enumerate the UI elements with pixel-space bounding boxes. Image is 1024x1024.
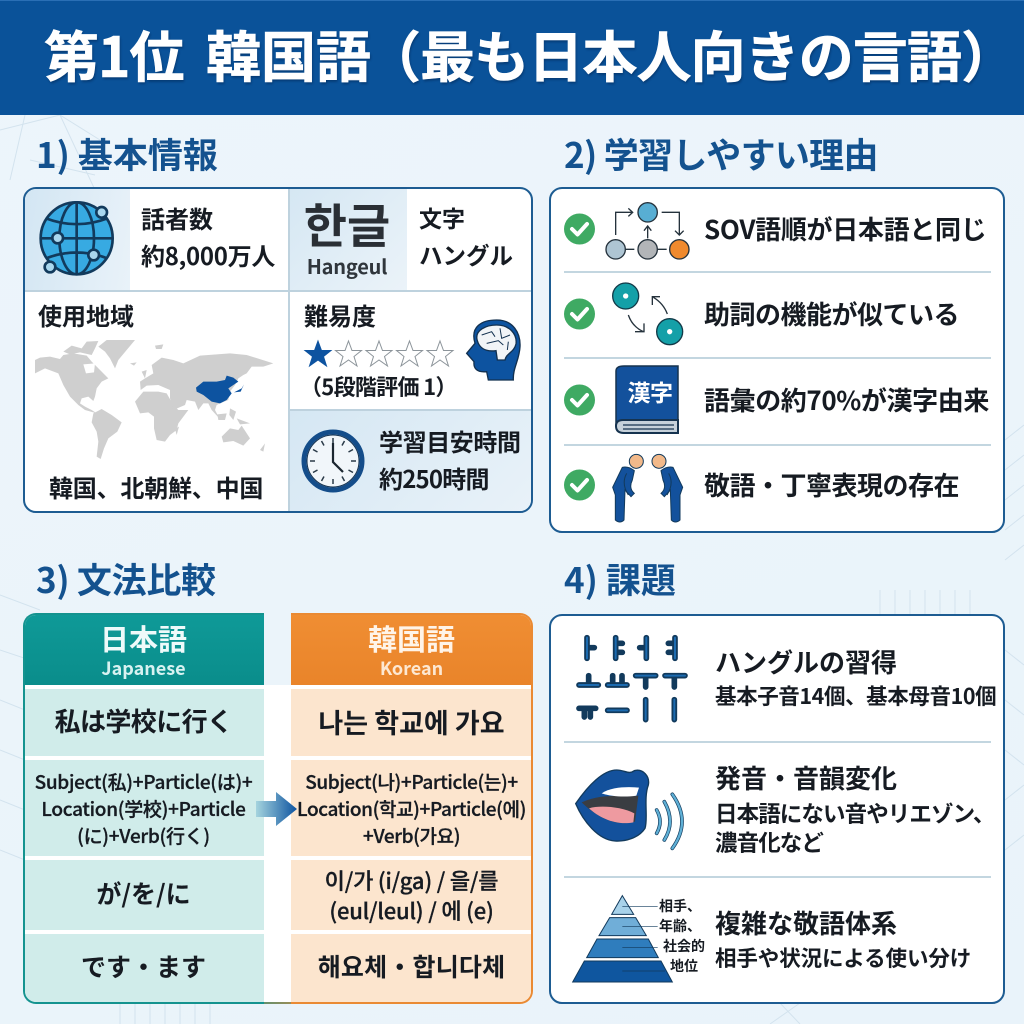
- japanese column subtitle: Japanese: [101, 655, 186, 681]
- reason 3: 語彙の約70%が漢字由来: [704, 381, 989, 418]
- icon: brain head: [466, 319, 521, 381]
- japanese row 2: Location(学校)+Particle: [41, 795, 246, 822]
- japanese column title: 日本語: [100, 617, 187, 659]
- korean header: [291, 613, 533, 685]
- panel: reasons: [549, 187, 1005, 533]
- china highlight: [196, 376, 244, 403]
- hangeul latin: Hangeul: [307, 251, 387, 280]
- icon: particles: [612, 282, 684, 346]
- challenge 2 text: [715, 797, 994, 858]
- script label: 文字: [419, 200, 465, 234]
- heading: 2 reasons: 2) 学習しやすい理由: [564, 128, 878, 179]
- icon: honorific pyramid: [572, 894, 674, 982]
- icon: kanji book: 漢字: [628, 374, 672, 408]
- hangeul large: 한글: [304, 188, 390, 257]
- globe cell background: [25, 189, 130, 291]
- reason 4: 敬語・丁寧表現の存在: [704, 466, 959, 503]
- difficulty label: 難易度: [304, 297, 376, 332]
- star rating: [304, 340, 454, 368]
- heading: 1 basic info: 1) 基本情報: [36, 128, 218, 179]
- study time label: 学習目安時間: [379, 423, 521, 458]
- title banner: [0, 0, 1024, 115]
- japanese row 2: Subject(私)+Particle(は)+: [35, 768, 252, 795]
- icon: bowing people: [612, 454, 684, 522]
- korean row 3: 이/가 (i/ga) / 을/를: [325, 864, 498, 896]
- japanese row 2: [35, 768, 252, 849]
- challenge 1 title: ハングルの習得: [715, 643, 897, 680]
- korean row 2: [297, 768, 526, 849]
- reason 1: SOV語順が日本語と同じ: [704, 210, 986, 247]
- region value: 韓国、北朝鮮、中国: [49, 469, 263, 504]
- speakers label: 話者数: [141, 200, 213, 235]
- pyramid labels: [659, 896, 705, 976]
- icon: hangul vowels: [576, 634, 688, 722]
- challenge 3 text: 相手や状況による使い分け: [715, 942, 971, 973]
- pyramid labels: 年齢、: [659, 916, 701, 936]
- icon: mouth: [574, 769, 684, 850]
- column gap: [263, 685, 293, 1004]
- icon: clock: [302, 430, 364, 492]
- japanese row 4: です・ます: [81, 948, 206, 984]
- arrow: [256, 792, 297, 826]
- icon: kanji book: [615, 365, 679, 434]
- rating caption: （5段階評価 1）: [300, 370, 457, 402]
- bottom border across columns: [223, 1002, 333, 1004]
- challenge 2 text: 日本語にない音やリエゾン、: [715, 797, 994, 829]
- pyramid labels: 社会的: [663, 936, 705, 956]
- pyramid labels: 相手、: [659, 896, 701, 916]
- korean row 2: +Verb(가요): [363, 822, 460, 849]
- icon: SOV order: [605, 202, 690, 260]
- study time value: 約250時間: [379, 460, 489, 495]
- korean column subtitle: Korean: [380, 655, 443, 681]
- korean row 3: (eul/leul) / 에 (e): [329, 894, 494, 926]
- panel: grammar comparison: [23, 613, 533, 1004]
- script value: ハングル: [419, 237, 513, 271]
- title: [44, 13, 1015, 93]
- japanese row 2: (に)+Verb(行く): [77, 822, 210, 849]
- hangeul cell background: [289, 189, 407, 291]
- world map: [35, 340, 273, 459]
- icon: globe: [39, 201, 114, 276]
- heading: 3 grammar: 3) 文法比較: [36, 553, 216, 604]
- challenge 3 title: 複雑な敬語体系: [715, 904, 897, 941]
- korean row 4: 해요체・합니다체: [318, 948, 505, 984]
- japanese header: [23, 613, 264, 685]
- title: 第1位: [44, 13, 183, 93]
- check icons: [564, 214, 595, 500]
- title: （最も日本人向きの言語）: [366, 13, 1015, 93]
- speakers value: 約8,000万人: [141, 237, 275, 272]
- challenge 2 title: 発音・音韻変化: [715, 759, 897, 796]
- korean column title: 韓国語: [368, 617, 455, 659]
- korean row 2: Subject(나)+Particle(는)+: [305, 768, 518, 795]
- korean row 1: 나는 학교에 가요: [318, 702, 505, 741]
- challenge 1 text: 基本子音14個、基本母音10個: [715, 680, 996, 711]
- pyramid labels: 地位: [670, 956, 698, 976]
- panel: basic info: [23, 187, 533, 513]
- japanese row 3: が/を/に: [96, 875, 191, 911]
- title: 韓国語: [206, 13, 371, 93]
- panel: challenges: [549, 614, 1005, 1004]
- challenge 2 text: 濃音化など: [715, 826, 823, 858]
- study time cell background: [289, 410, 535, 515]
- korean row 2: Location(학교)+Particle(에): [297, 795, 526, 822]
- region label: 使用地域: [38, 297, 134, 332]
- korean row 3: [325, 864, 498, 926]
- reason 2: 助詞の機能が似ている: [704, 295, 959, 332]
- column outline: [23, 613, 264, 1004]
- heading: 4 challenges: 4) 課題: [564, 553, 676, 604]
- japanese row 1: 私は学校に行く: [55, 702, 232, 739]
